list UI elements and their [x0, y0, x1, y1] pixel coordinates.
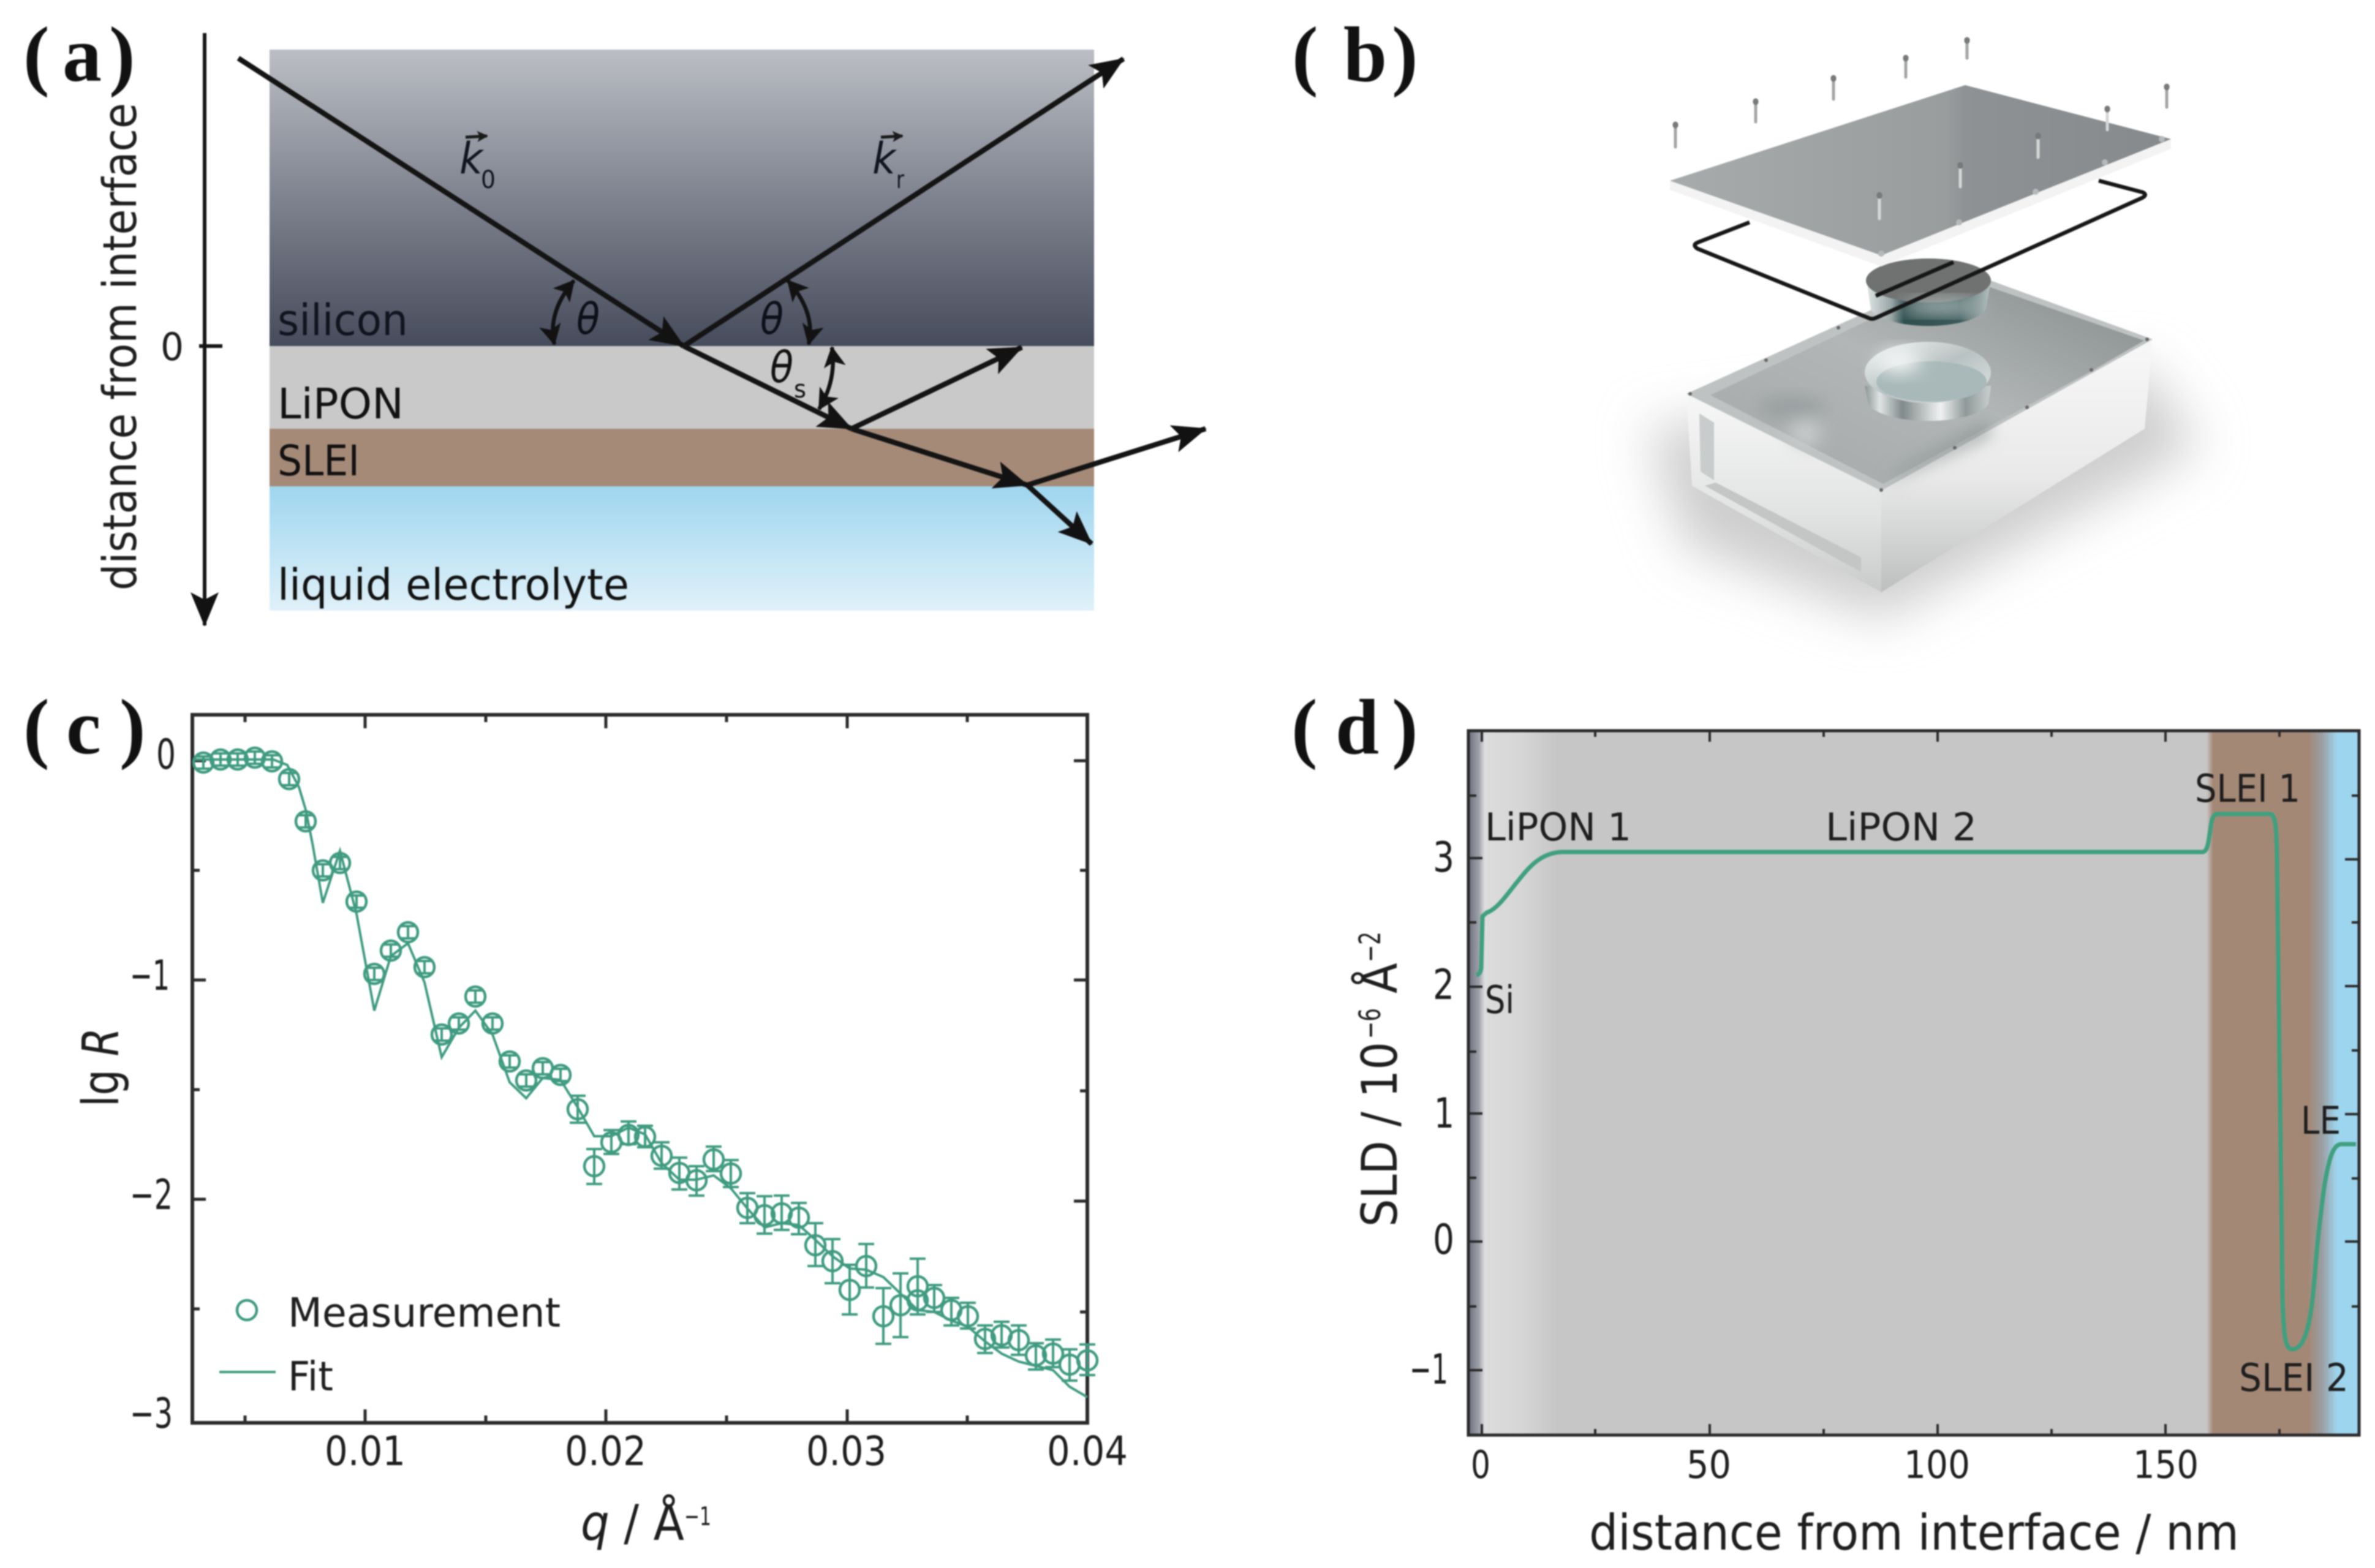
axis zero: 0: [160, 325, 184, 369]
y tick labels: 1: [1434, 1090, 1454, 1138]
y tick labels: [1410, 834, 1454, 1394]
region labels: LE: [2301, 1098, 2341, 1143]
region labels: LiPON 2: [1826, 805, 1977, 850]
y tick labels: 0: [156, 731, 176, 779]
region labels: [1485, 766, 2349, 1400]
y tick labels: 3: [1433, 834, 1454, 882]
plot frame and ticks: [192, 715, 1087, 1423]
error bars: [195, 752, 1095, 1381]
SLD curve: [1476, 814, 2356, 1349]
label: theta s: [770, 342, 806, 404]
axis: distance from interface arrow: [199, 33, 222, 625]
layer: liquid electrolyte: [270, 486, 1094, 611]
x tick labels: 0.04: [1047, 1428, 1128, 1475]
label: k0: 0: [481, 166, 496, 194]
y axis label: −6: [1353, 1008, 1388, 1039]
angle arcs: [553, 281, 833, 409]
text: liquid electrolyte: liquid electrolyte: [278, 560, 629, 610]
y tick labels: [130, 731, 176, 1438]
label: theta s: s: [794, 375, 806, 404]
label: k0: k: [459, 134, 484, 184]
fixing points on cell body: [1688, 326, 2149, 492]
label: theta s: θ: [770, 342, 793, 393]
y axis label: SLD / 10: [1351, 1042, 1408, 1227]
y tick labels: 2: [1433, 961, 1454, 1009]
x tick labels: 0.01: [325, 1428, 406, 1475]
label: kr: r: [896, 166, 904, 194]
region labels: LiPON 1: [1485, 805, 1631, 850]
measurement points: [194, 748, 1097, 1374]
panel label c: (c): [23, 684, 146, 771]
text: LiPON: LiPON: [278, 380, 404, 429]
label: theta left: θ: [576, 294, 600, 344]
x tick labels: 50: [1686, 1442, 1731, 1487]
text: silicon: silicon: [278, 295, 408, 345]
rays: incident, reflected and transmitted: [238, 58, 1206, 544]
panel a: reflection schematic: [23, 11, 1206, 625]
y axis label: [1351, 932, 1408, 1227]
label: theta right: θ: [760, 294, 783, 344]
well in body: [1865, 342, 1991, 421]
x tick labels: [1471, 1442, 2199, 1487]
layer: silicon: [270, 50, 1094, 346]
legend: Measurement: [288, 1289, 561, 1336]
y tick labels: −2: [130, 1171, 173, 1219]
panel d: SLD profile chart: [1291, 684, 2359, 1561]
top plate: [1670, 85, 2171, 266]
o-ring seal: [1694, 181, 2145, 318]
y tick labels: 0: [1433, 1216, 1454, 1264]
y axis label: lg R: [72, 1028, 130, 1107]
plot frame and ticks: [1468, 731, 2359, 1435]
x tick labels: 0: [1471, 1442, 1490, 1487]
x tick labels: 0.03: [806, 1428, 886, 1475]
x axis label: q / Å: [581, 1494, 684, 1551]
x tick labels: 0.02: [565, 1428, 646, 1475]
text: SLEI: SLEI: [278, 437, 360, 486]
region labels: SLEI 1: [2195, 766, 2300, 811]
axis label: distance from interface: [93, 103, 147, 590]
shadow: [1648, 368, 2199, 619]
layer: LiPON: [270, 346, 1094, 429]
label: kr: [872, 134, 904, 194]
y tick labels: −3: [130, 1390, 173, 1438]
legend: [219, 1289, 561, 1400]
panel label a: (a): [23, 11, 135, 98]
x tick labels: 150: [2133, 1442, 2199, 1487]
y tick labels: −1: [1410, 1346, 1448, 1394]
x axis label: distance from interface / nm: [1589, 1504, 2239, 1561]
region labels: SLEI 2: [2239, 1355, 2349, 1400]
x axis label: −1: [684, 1501, 711, 1531]
panel label b: (b): [1292, 11, 1418, 98]
y axis label: Å: [1351, 963, 1408, 993]
panel b: exploded cell illustration: [1292, 11, 2199, 619]
plot background: [1468, 731, 2359, 1435]
y axis label: −2: [1353, 932, 1388, 962]
panel label d: (d): [1291, 684, 1418, 771]
x tick labels: 100: [1904, 1442, 1970, 1487]
region labels: Si: [1485, 978, 1514, 1022]
legend: Fit: [288, 1353, 333, 1400]
screws: [1675, 40, 2167, 219]
label: k0: [459, 134, 496, 194]
x tick labels: [325, 1428, 1128, 1475]
panel c: reflectivity chart: [23, 684, 1128, 1551]
sample disc: [1866, 258, 1991, 326]
y tick labels: −1: [130, 952, 170, 1000]
layer: SLEI: [270, 429, 1094, 486]
cell body: [1686, 270, 2153, 592]
fit line: [194, 760, 1087, 1397]
label: kr: k: [872, 134, 897, 184]
